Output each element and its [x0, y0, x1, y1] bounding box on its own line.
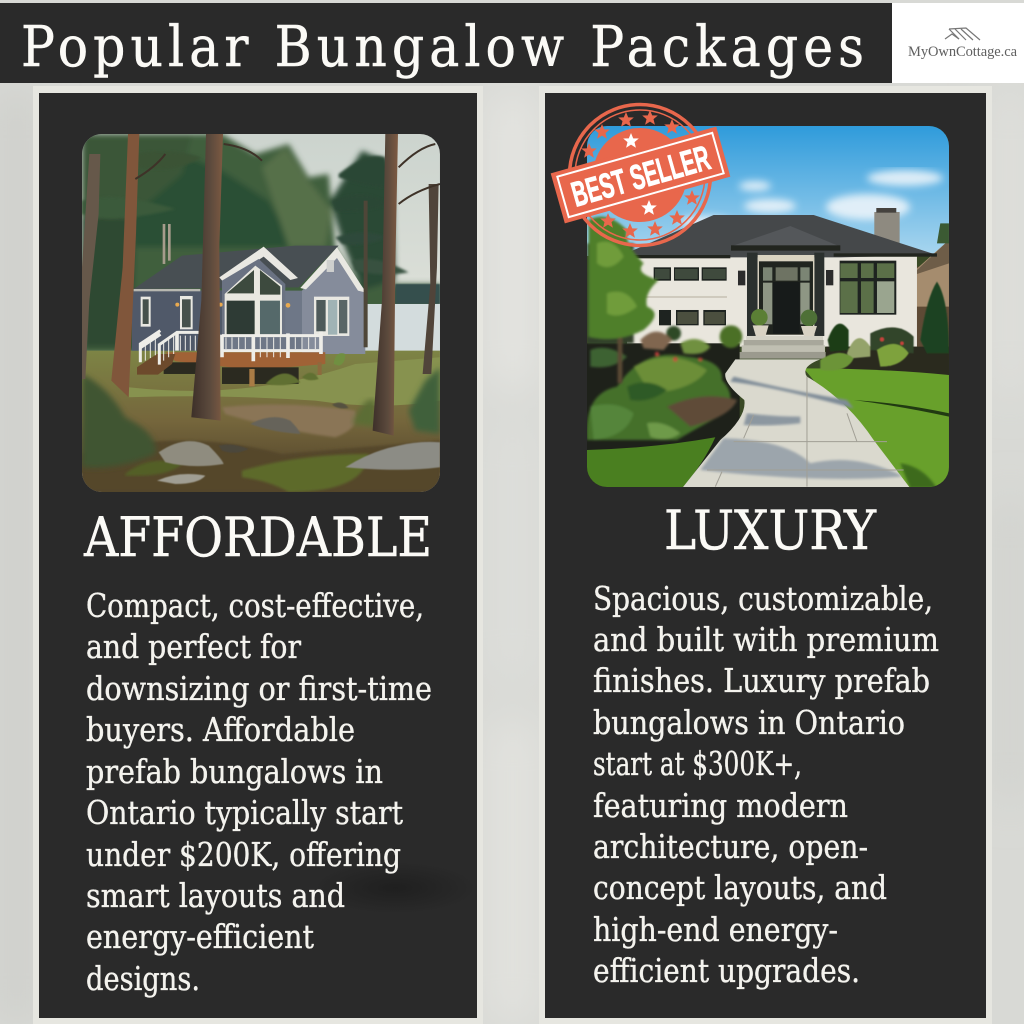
body text: affordable: prefab bungalows in	[86, 752, 383, 791]
banner	[551, 127, 730, 223]
body text: luxury: and built with premium	[593, 620, 939, 659]
lamps	[738, 271, 745, 285]
body text: luxury: featuring modern	[593, 786, 848, 825]
deck	[166, 352, 326, 368]
panel: affordable	[33, 86, 483, 1024]
cottage	[132, 290, 302, 351]
heading: AFFORDABLE: AFFORDABLE	[83, 506, 432, 569]
pine boughs	[82, 151, 409, 274]
steps	[746, 336, 823, 340]
roof	[619, 215, 937, 257]
body text: luxury: start at $300K+,	[593, 744, 802, 783]
body text: luxury: high-end energy-	[593, 910, 838, 949]
plants left	[587, 325, 742, 440]
body text: affordable: Compact, cost-effective,	[86, 586, 424, 625]
lawn left	[587, 437, 715, 488]
banner text: BEST SELLER	[567, 138, 715, 215]
body text: affordable: Ontario typically start	[86, 793, 403, 832]
body text: luxury: efficient upgrades.	[593, 951, 860, 990]
ground base	[587, 343, 740, 472]
body text: affordable: designs.	[86, 959, 200, 998]
neighbour house	[917, 266, 949, 347]
body text: luxury: Spacious, customizable,	[593, 579, 933, 618]
logo	[892, 3, 1024, 83]
soft shadow	[313, 862, 477, 914]
body text: luxury: bungalows in Ontario	[593, 703, 905, 742]
photo: lakeside cottage	[82, 134, 440, 492]
logo text: MyOwnCottage.ca	[908, 44, 1018, 60]
entry	[747, 253, 758, 336]
body text: affordable: under $200K, offering	[86, 835, 401, 874]
body text: affordable: downsizing or first-time	[86, 669, 432, 708]
title: Popular Bungalow Packages	[21, 15, 864, 80]
body text: affordable: and perfect for	[86, 627, 302, 666]
ground	[82, 351, 440, 492]
lawn right	[804, 368, 949, 488]
stamp: best seller	[551, 104, 730, 246]
plants right	[820, 282, 949, 371]
heading: LUXURY: LUXURY	[664, 499, 877, 562]
body text: luxury: finishes. Luxury prefab	[593, 661, 930, 700]
side windows	[141, 297, 151, 327]
rocks	[157, 402, 440, 484]
stars	[581, 110, 700, 238]
tree	[587, 217, 659, 383]
body text: affordable: energy-efficient	[86, 917, 314, 956]
walkway	[682, 359, 910, 488]
photo: modern bungalow	[587, 126, 949, 488]
icon: roof	[945, 28, 980, 40]
windows	[654, 261, 896, 325]
body text: luxury: architecture, open-	[593, 827, 868, 866]
title bar	[0, 3, 892, 83]
trunks	[191, 134, 223, 421]
panel: luxury	[539, 86, 992, 1024]
body text: luxury	[593, 579, 939, 990]
clouds	[680, 170, 943, 228]
chimney	[874, 212, 900, 243]
body text: affordable	[86, 586, 432, 998]
body text: luxury: concept layouts, and	[593, 868, 887, 907]
planters	[751, 309, 768, 326]
big window	[225, 266, 282, 336]
main wall	[627, 257, 917, 347]
body text: affordable: buyers. Affordable	[86, 710, 355, 749]
far forest	[82, 134, 440, 354]
body text: affordable: smart layouts and	[86, 876, 345, 915]
bushes	[82, 374, 156, 468]
